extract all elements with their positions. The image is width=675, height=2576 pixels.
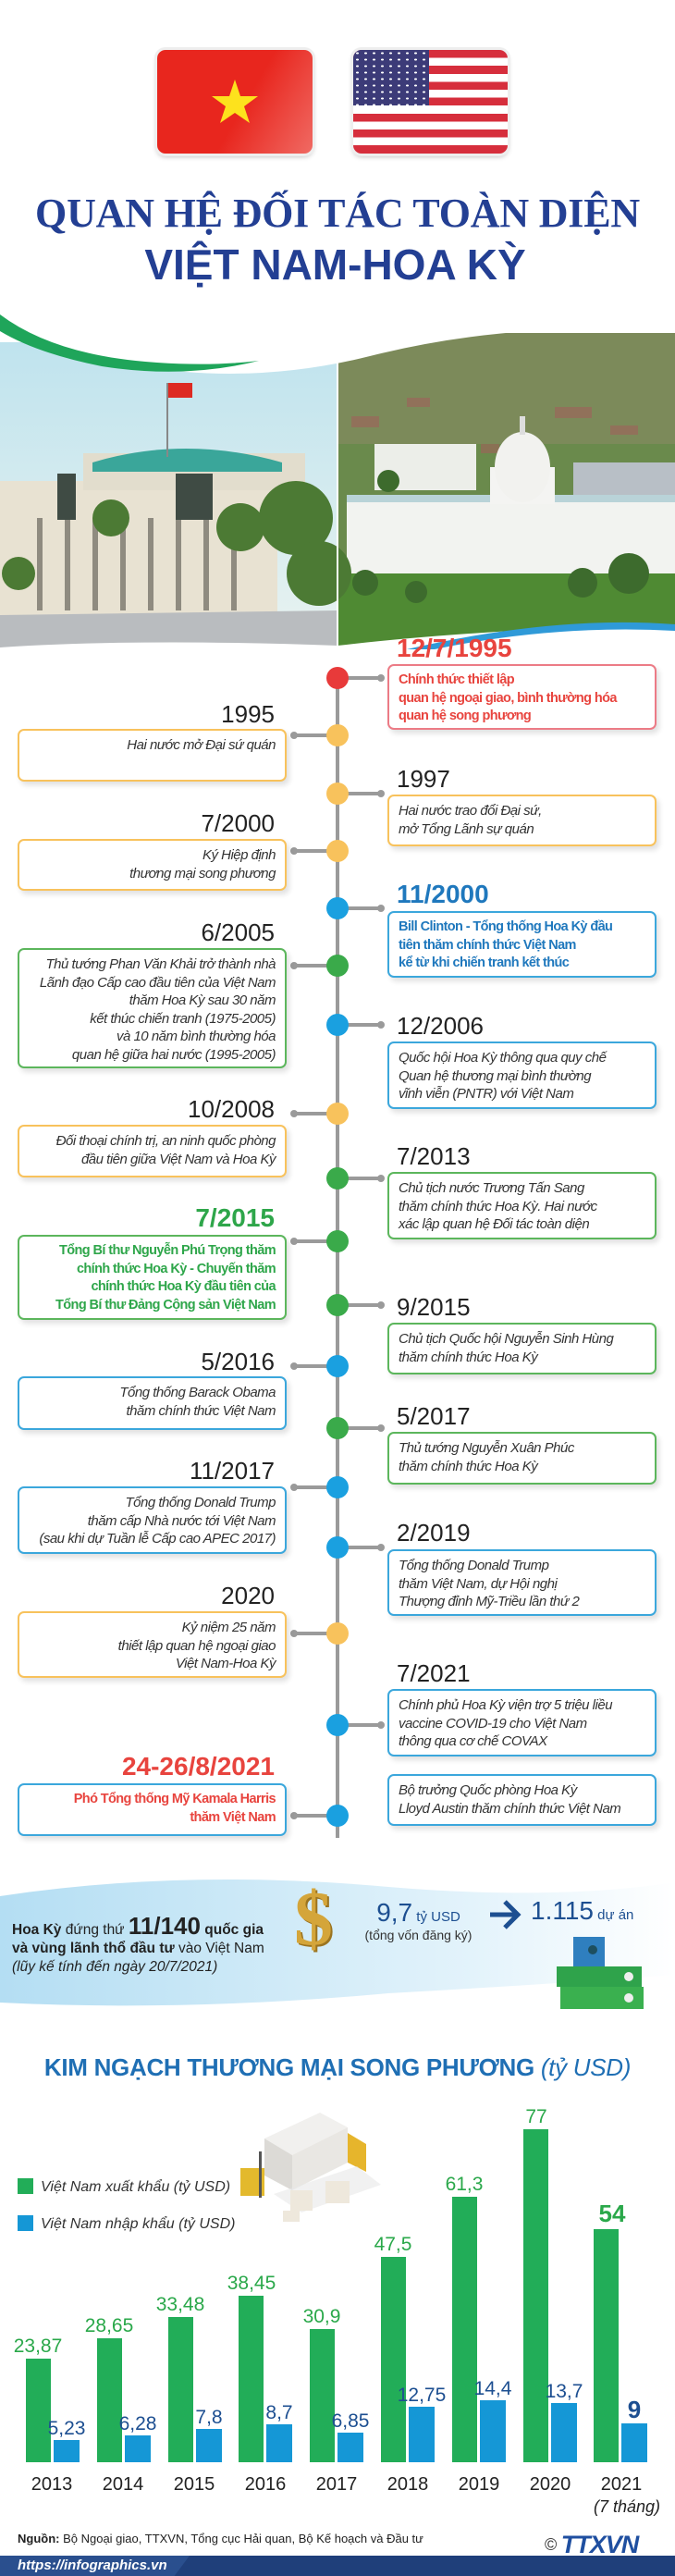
event: 5/2016 (18, 1348, 349, 1436)
event: 7/2021 (326, 1659, 660, 1761)
event: 5/2016: Tổng thống Barack Obama (119, 1385, 276, 1400)
event: 7/2015: chính thức Hoa Kỳ - Chuyến thăm (77, 1262, 276, 1276)
event: 7/2021: 7/2021 (397, 1659, 471, 1687)
event: 7/2013: thăm chính thức Hoa Kỳ. Hai nước (399, 1199, 597, 1214)
event: 7/2013: 7/2013 (397, 1142, 471, 1170)
event: 11/2017 (18, 1457, 349, 1559)
event: 2/2019: 2/2019 (397, 1519, 471, 1547)
flag: USA (353, 50, 508, 154)
event: 11/2017: 11/2017 (190, 1457, 275, 1485)
event: 12/2006 (326, 1012, 660, 1114)
bar chart: 2013 (31, 2474, 72, 2495)
event: 24-26/8/2021: thăm Việt Nam (190, 1810, 276, 1825)
bar chart: 28,65 (85, 2315, 133, 2336)
title (35, 191, 640, 289)
event: 2020 (18, 1582, 349, 1683)
event: 7/2021: vaccine COVID-19 cho Việt Nam (399, 1716, 587, 1732)
event: 7/2015: 7/2015 (195, 1203, 275, 1232)
capital stat: 9,7 tỷ USD (376, 1898, 460, 1927)
event: 2/2019: Thượng đỉnh Mỹ-Triều lần thứ 2 (399, 1594, 579, 1609)
event: 7/2015 (18, 1203, 349, 1325)
event: 12/2006: Quốc hội Hoa Kỳ thông qua quy chế (399, 1050, 607, 1066)
bar chart: 54 (599, 2200, 626, 2227)
event: 7/2021: thông qua cơ chế COVAX (399, 1733, 547, 1749)
event: 6/2005: Lãnh đạo Cấp cao đầu tiên của Việt Nam (40, 975, 276, 991)
event: 11/2000 (326, 880, 660, 982)
event: 9/2015: Chủ tịch Quốc hội Nguyễn Sinh Hùng (399, 1331, 613, 1347)
bar chart: 6,85 (332, 2410, 369, 2432)
bar chart: 14,4 (474, 2378, 512, 2399)
event: 7/2000 (18, 809, 349, 895)
source: Nguồn: Bộ Ngoại giao, TTXVN, Tổng cục Hải quan, Bộ Kế hoạch và Đầu tư (18, 2532, 423, 2545)
bar chart: 9 (628, 2396, 641, 2423)
event: 24-26/8/2021 (18, 1752, 349, 1841)
event: 2020: Kỷ niệm 25 năm (182, 1620, 276, 1635)
icon: dollar: $ (294, 1876, 333, 1962)
event: 2020: Việt Nam-Hoa Kỳ (176, 1656, 276, 1671)
event: 6/2005: thăm Hoa Kỳ sau 30 năm (129, 992, 276, 1008)
bar chart: 12,75 (398, 2385, 446, 2406)
event: 12/2006: vĩnh viễn (PNTR) với Việt Nam (399, 1086, 573, 1102)
bar chart: 2021 (601, 2474, 642, 2495)
event: 12/2006: Quan hệ thương mại bình thường (399, 1068, 591, 1084)
event: 7/2015: Tổng Bí thư Nguyễn Phú Trọng thăm (59, 1243, 276, 1258)
event: 6/2005 (18, 918, 349, 1073)
legend (18, 2178, 235, 2232)
event: 7/2000: thương mại song phương (129, 866, 276, 881)
event: 5/2016: thăm chính thức Việt Nam (127, 1403, 276, 1419)
event: 12/2006: 12/2006 (397, 1012, 484, 1040)
event: 1995: Hai nước mở Đại sứ quán (127, 737, 276, 753)
event: 1997: 1997 (397, 765, 450, 793)
event: Lloyd Austin (387, 1774, 657, 1826)
investment band (0, 1880, 618, 2005)
event: Lloyd Austin: Lloyd Austin thăm chính thức Việt Nam (399, 1801, 620, 1817)
event: 7/2015: Tổng Bí thư Đảng Cộng sản Việt Nam (55, 1298, 276, 1313)
event: 11/2000: 11/2000 (397, 880, 489, 908)
bar chart: 5,23 (48, 2418, 85, 2439)
bar chart: 7,8 (195, 2407, 223, 2428)
event: 24-26/8/2021: Phó Tổng thống Mỹ Kamala Harris (74, 1792, 276, 1806)
event: 2/2019 (326, 1519, 660, 1621)
chart title: KIM NGẠCH THƯƠNG MẠI SONG PHƯƠNG (tỷ USD) (44, 2053, 631, 2081)
event: 11/2017: (sau khi dự Tuần lễ Cấp cao APEC 2017) (39, 1531, 276, 1547)
bar chart: 2016 (245, 2474, 286, 2495)
event: 5/2017: Thủ tướng Nguyễn Xuân Phúc (399, 1440, 574, 1456)
event: Lloyd Austin: Bộ trưởng Quốc phòng Hoa Kỳ (399, 1782, 577, 1798)
event: 24-26/8/2021: 24-26/8/2021 (122, 1752, 275, 1781)
event: 11/2000: Bill Clinton - Tổng thống Hoa Kỳ đầu (399, 919, 612, 934)
bar chart: 2014 (103, 2474, 143, 2495)
flag: Vietnam (157, 50, 313, 154)
investment text (12, 1912, 264, 1975)
event: 10/2008: Đối thoại chính trị, an ninh quốc phòng (56, 1133, 276, 1149)
event: 12/7/1995: quan hệ song phương (399, 709, 531, 723)
event: 6/2005: kết thúc chiến tranh (1975-2005) (90, 1011, 276, 1027)
event: 1995: 1995 (221, 700, 275, 728)
event: 7/2000: Ký Hiệp định (202, 847, 276, 863)
footer bar: https://infographics.vn (18, 2558, 167, 2573)
bar chart: 13,7 (546, 2381, 583, 2402)
bar chart: 30,9 (303, 2306, 340, 2327)
bar chart: 6,28 (119, 2413, 156, 2434)
event: 7/2013: xác lập quan hệ Đối tác toàn diện (399, 1216, 589, 1232)
bar chart (14, 2109, 660, 2516)
event: 2/2019: thăm Việt Nam, dự Hội nghị (399, 1576, 557, 1592)
event: 11/2017: Tổng thống Donald Trump (126, 1495, 276, 1510)
event: 10/2008 (18, 1095, 349, 1182)
event: 11/2000: kể từ khi chiến tranh kết thúc (399, 955, 569, 970)
event: 12/7/1995 (326, 634, 660, 734)
projects stat: 1.115 dự án (531, 1896, 633, 1925)
timeline axis (336, 678, 339, 1838)
event: 1997: mở Tổng Lãnh sự quán (399, 821, 534, 837)
icon: truck (240, 2113, 381, 2222)
event: 2/2019: Tổng thống Donald Trump (399, 1558, 549, 1573)
event: 1995 (18, 700, 349, 786)
header photos (0, 314, 675, 649)
event: 7/2015: chính thức Hoa Kỳ đầu tiên của (91, 1279, 276, 1294)
bar chart: 2018 (387, 2474, 428, 2495)
event: 6/2005: Thủ tướng Phan Văn Khải trở thành nhà (46, 956, 276, 972)
event: 7/2000: 7/2000 (201, 809, 275, 837)
bar chart: 2019 (459, 2474, 499, 2495)
bar chart: 61,3 (446, 2174, 483, 2195)
title: VIỆT NAM-HOA KỲ (144, 240, 526, 289)
capital stat: (tổng vốn đăng ký) (365, 1928, 472, 1942)
event: 5/2017 (326, 1402, 660, 1489)
capital stat (365, 1898, 472, 1942)
event: 10/2008: 10/2008 (188, 1095, 275, 1123)
title: QUAN HỆ ĐỐI TÁC TOÀN DIỆN (35, 191, 640, 236)
investment text: và vùng lãnh thổ đầu tư vào Việt Nam (12, 1941, 264, 1956)
investment text: (lũy kế tính đến ngày 20/7/2021) (12, 1959, 217, 1975)
event: 7/2013: Chủ tịch nước Trương Tấn Sang (399, 1180, 584, 1196)
event: 11/2000: tiên thăm chính thức Việt Nam (399, 938, 576, 953)
legend: Việt Nam nhập khẩu (tỷ USD) (41, 2216, 235, 2232)
bar chart: 33,48 (156, 2294, 204, 2315)
event: 5/2017: thăm chính thức Hoa Kỳ (399, 1459, 537, 1474)
event: 7/2021: Chính phủ Hoa Kỳ viện trợ 5 triệu liều (399, 1697, 612, 1713)
event: 1997 (326, 765, 660, 851)
arrow (490, 1900, 522, 1929)
event: 2020: 2020 (221, 1582, 275, 1609)
event: 5/2016: 5/2016 (201, 1348, 275, 1375)
bar chart: 2020 (530, 2474, 571, 2495)
bar chart: 8,7 (265, 2402, 293, 2423)
bar chart: 2017 (316, 2474, 357, 2495)
bar chart: 2015 (174, 2474, 215, 2495)
event: 6/2005: và 10 năm bình thường hóa (117, 1029, 276, 1044)
event: 5/2017: 5/2017 (397, 1402, 471, 1430)
bar chart: 47,5 (374, 2234, 411, 2255)
bar chart: (7 tháng) (594, 2497, 660, 2516)
bar chart: 38,45 (227, 2273, 276, 2294)
event: 6/2005: quan hệ giữa hai nước (1995-2005) (72, 1047, 276, 1063)
event: 7/2013 (326, 1142, 660, 1245)
logo: TTXVN: © TTXVN (545, 2531, 638, 2558)
event: 1997: Hai nước trao đổi Đại sứ, (399, 803, 542, 819)
event: 9/2015 (326, 1293, 660, 1380)
bar chart: 23,87 (14, 2336, 62, 2357)
event: 10/2008: đầu tiên giữa Việt Nam và Hoa Kỳ (81, 1152, 276, 1167)
investment text: Hoa Kỳ đứng thứ 11/140 quốc gia (12, 1912, 264, 1940)
event: 12/7/1995: Chính thức thiết lập (399, 672, 514, 687)
event: 2020: thiết lập quan hệ ngoại giao (118, 1638, 276, 1654)
event: 11/2017: thăm cấp Nhà nước tới Việt Nam (88, 1513, 276, 1529)
event: 9/2015: thăm chính thức Hoa Kỳ (399, 1350, 537, 1365)
icon: binders (557, 1937, 644, 2009)
event: 12/7/1995: quan hệ ngoại giao, bình thường hóa (399, 691, 617, 706)
event: 6/2005: 6/2005 (201, 918, 275, 946)
legend: Việt Nam xuất khẩu (tỷ USD) (41, 2179, 230, 2195)
event: 9/2015: 9/2015 (397, 1293, 471, 1321)
event: 12/7/1995: 12/7/1995 (397, 634, 512, 662)
footer bar (0, 2556, 675, 2576)
